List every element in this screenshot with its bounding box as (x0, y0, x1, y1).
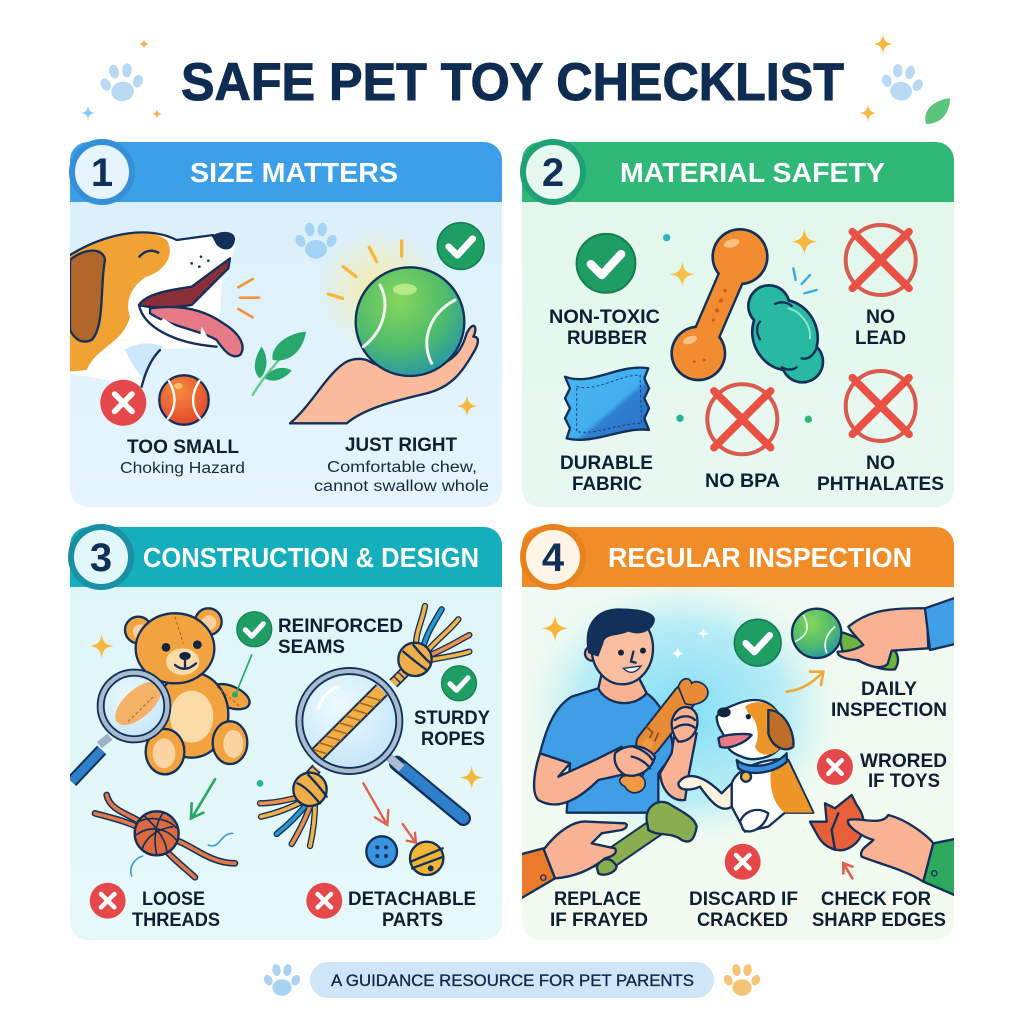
panel 4: regular inspection (518, 527, 958, 940)
panel 3 background (70, 527, 502, 940)
illustration: hand with green cracked bone (518, 802, 697, 900)
panel 4 cyan glow (522, 577, 842, 847)
text: no phthalates: NO (866, 452, 895, 474)
text: loose threads: LOOSE (142, 888, 205, 910)
text: discard if cracked (689, 888, 798, 931)
illustration: hand holding green ball (290, 227, 478, 423)
arrow: green to loose threads (191, 779, 215, 818)
text: check for sharp edges (812, 888, 946, 931)
icon: paw print (294, 222, 338, 259)
panel 1: size matters (70, 142, 502, 507)
arrow: orange to daily inspection (787, 672, 823, 692)
icon: discard x badge (725, 844, 761, 880)
text: wrored if toys: WRORED (860, 750, 947, 772)
footer paw right (722, 964, 762, 996)
text: no phthalates: PHTHALATES (817, 473, 944, 495)
text: non-toxic rubber: NON-TOXIC (549, 306, 660, 328)
text: check for sharp edges: CHECK FOR (821, 888, 931, 910)
panel 1 number badge (72, 142, 132, 202)
text: no bpa: NO BPA (705, 470, 780, 492)
panel 4 number badge (523, 527, 583, 587)
panel 4 number badge: 4 (542, 536, 565, 580)
icon: detachable parts x badge (306, 883, 342, 919)
title decorations (81, 34, 950, 124)
panel 2 background (522, 142, 954, 507)
icon: too small x badge (100, 380, 146, 426)
text: non-toxic rubber (549, 306, 660, 349)
text: check for sharp edges: SHARP EDGES (812, 909, 946, 931)
panel 1 background (70, 142, 502, 507)
text: detachable parts: DETACHABLE (348, 888, 476, 910)
panel 4 heading: REGULAR INSPECTION (608, 542, 912, 573)
illustration: orange bone toy (670, 228, 769, 381)
text: reinforced seams: SEAMS (278, 636, 345, 658)
illustration: rope toy with magnifier (260, 606, 469, 846)
motion lines near mouth (238, 279, 259, 317)
text: replace if frayed (550, 888, 648, 931)
text: no lead: LEAD (855, 327, 906, 349)
text: sturdy ropes: ROPES (421, 728, 485, 750)
text: durable fabric: FABRIC (572, 473, 642, 495)
text: just right: cannot swallow whole (314, 478, 489, 495)
arrow: red to sharp edges (843, 863, 852, 878)
icon: sturdy ropes check badge (442, 666, 476, 701)
text: daily inspection: DAILY (861, 678, 917, 700)
text: reinforced seams (278, 615, 403, 658)
illustration: man holding frayed toy (534, 608, 708, 813)
panel 2 heading: MATERIAL SAFETY (620, 157, 885, 188)
footer pill: A GUIDANCE RESOURCE FOR PET PARENTS (331, 972, 694, 990)
text: just right (314, 434, 489, 495)
text: reinforced seams: REINFORCED (278, 615, 403, 637)
text: durable fabric (560, 452, 653, 495)
footer paw left (262, 964, 302, 996)
icon: no bpa crossed circle (707, 384, 777, 454)
panel 3 header band (70, 527, 502, 587)
panel 1 header band (70, 142, 502, 202)
illustration: button and bell (366, 836, 443, 875)
illustration: teddy bear with magnifier (72, 608, 253, 782)
text: detachable parts (348, 888, 476, 931)
text: sturdy ropes (414, 707, 490, 750)
footer pill (310, 962, 714, 998)
text: replace if frayed: REPLACE (554, 888, 641, 910)
icon: sparkles and dot (89, 634, 483, 789)
illustration: dog (678, 700, 813, 832)
icon: leaf sprig (253, 332, 306, 395)
text: just right: Comfortable chew, (327, 459, 477, 476)
text: just right: JUST RIGHT (345, 434, 457, 456)
icon: daily inspection check badge (734, 619, 781, 666)
text: non-toxic rubber: RUBBER (567, 327, 647, 349)
illustration: yarn ball with loose threads (95, 795, 235, 877)
icon: small red ball (159, 375, 209, 425)
icon: no phthalates crossed circle (846, 371, 916, 441)
text: detachable parts: PARTS (382, 909, 443, 931)
icon: reinforced seams check badge (237, 612, 272, 647)
text: daily inspection (831, 678, 947, 721)
illustration: hand inspecting ball (792, 597, 958, 670)
panel 2 number badge: 2 (542, 151, 564, 195)
text: too small: Choking Hazard (120, 460, 245, 477)
text: too small (120, 436, 245, 477)
panel 3: construction and design (70, 527, 502, 940)
illustration: hand with broken red toy (810, 795, 958, 897)
illustration: dog with open mouth (70, 232, 243, 387)
text: too small: TOO SMALL (127, 436, 239, 458)
icon: worn toys x badge (817, 749, 853, 785)
panel 4 header band (522, 527, 954, 587)
icon: just right check badge (437, 223, 484, 269)
illustration: fabric swatch (565, 368, 649, 440)
panel 2 header band (522, 142, 954, 202)
icon: non-toxic check badge (577, 234, 635, 293)
icon: loose threads x badge (90, 883, 126, 919)
icon: sparkles and dots (663, 228, 818, 423)
icon: no lead crossed circle (846, 225, 916, 295)
text: no phthalates (817, 452, 944, 495)
text: loose threads (132, 888, 220, 931)
arrows: red to detachable parts (363, 783, 416, 843)
text: wrored if toys (860, 750, 947, 792)
text: loose threads: THREADS (132, 909, 220, 931)
title: SAFE PET TOY CHECKLIST (181, 53, 844, 112)
panel 3 heading: CONSTRUCTION & DESIGN (143, 542, 479, 573)
text: discard if cracked: CRACKED (697, 909, 788, 931)
icon: sparkle (456, 395, 478, 417)
panel 3 number badge (71, 527, 131, 587)
text: wrored if toys: IF TOYS (868, 770, 940, 792)
icon: sparkles (542, 615, 709, 660)
panel 2 number badge (523, 142, 583, 202)
panel 3 number badge: 3 (90, 536, 112, 580)
panel 2: material safety (522, 142, 954, 507)
panel 4 background (522, 527, 954, 940)
text: no lead: NO (866, 306, 895, 328)
text: discard if cracked: DISCARD IF (689, 888, 798, 910)
text: durable fabric: DURABLE (560, 452, 653, 474)
text: replace if frayed: IF FRAYED (550, 909, 648, 931)
text: daily inspection: INSPECTION (831, 699, 947, 721)
illustration: teal chew toy (739, 268, 831, 384)
text: sturdy ropes: STURDY (414, 707, 490, 729)
text: no lead (855, 306, 906, 349)
panel 1 heading: SIZE MATTERS (190, 157, 398, 188)
panel 1 number badge: 1 (91, 151, 113, 195)
